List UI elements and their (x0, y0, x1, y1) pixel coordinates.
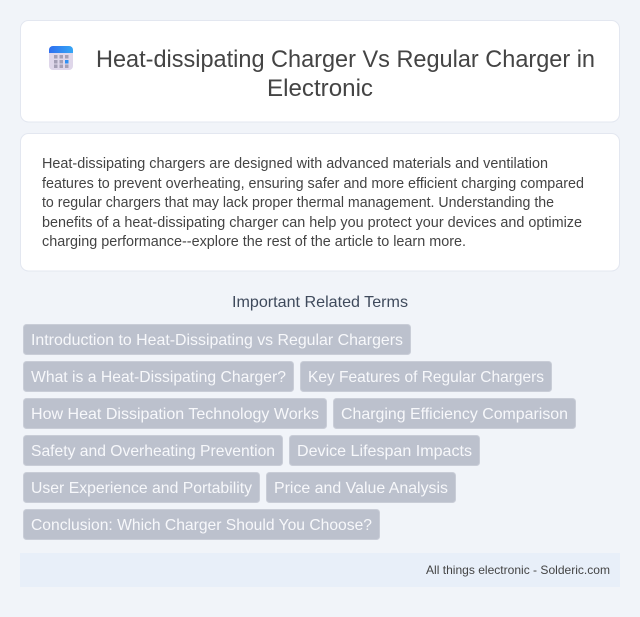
title (96, 46, 595, 102)
intro paragraph (42, 156, 584, 250)
tag (24, 324, 410, 354)
panel: title card (20, 20, 620, 122)
intro paragraph: benefits of a heat-dissipating charger can help you protect your devices and optimize (42, 215, 582, 231)
tag: User Experience and Portability (31, 480, 252, 497)
title: Heat-dissipating Charger Vs Regular Charger in (96, 46, 595, 73)
tag (24, 362, 294, 392)
tag: Price and Value Analysis (274, 480, 448, 497)
tag (24, 398, 326, 428)
tag: Charging Efficiency Comparison (341, 406, 568, 423)
heading: related terms: Important Related Terms (232, 294, 408, 311)
tag: What is a Heat-Dissipating Charger? (31, 369, 286, 386)
tag (24, 472, 260, 502)
panel: related term tags (24, 324, 576, 540)
tag (266, 472, 456, 502)
tag: Device Lifespan Impacts (297, 443, 472, 460)
tag (290, 436, 480, 466)
intro paragraph: Heat-dissipating chargers are designed with advanced materials and ventilation (42, 156, 548, 172)
tag (334, 398, 576, 428)
tag: Conclusion: Which Charger Should You Choose? (31, 517, 372, 534)
tag: Key Features of Regular Chargers (308, 369, 544, 386)
tag: Introduction to Heat-Dissipating vs Regular Chargers (31, 332, 403, 349)
tag (300, 362, 552, 392)
intro paragraph: to regular chargers that may lack proper thermal management. Understanding the (42, 195, 554, 211)
panel: introduction text (20, 134, 620, 271)
intro paragraph: features to prevent overheating, ensuring safer and more efficient charging compared (42, 176, 584, 192)
tag (24, 436, 282, 466)
footer credit: All things electronic - Solderic.com (426, 563, 610, 577)
footer (20, 553, 620, 587)
tag (24, 510, 380, 540)
tag: Safety and Overheating Prevention (31, 443, 275, 460)
intro paragraph: charging performance--explore the rest of the article to learn more. (42, 234, 466, 250)
icon: calendar (49, 46, 73, 70)
title: Electronic (267, 75, 373, 102)
tag: How Heat Dissipation Technology Works (31, 406, 319, 423)
